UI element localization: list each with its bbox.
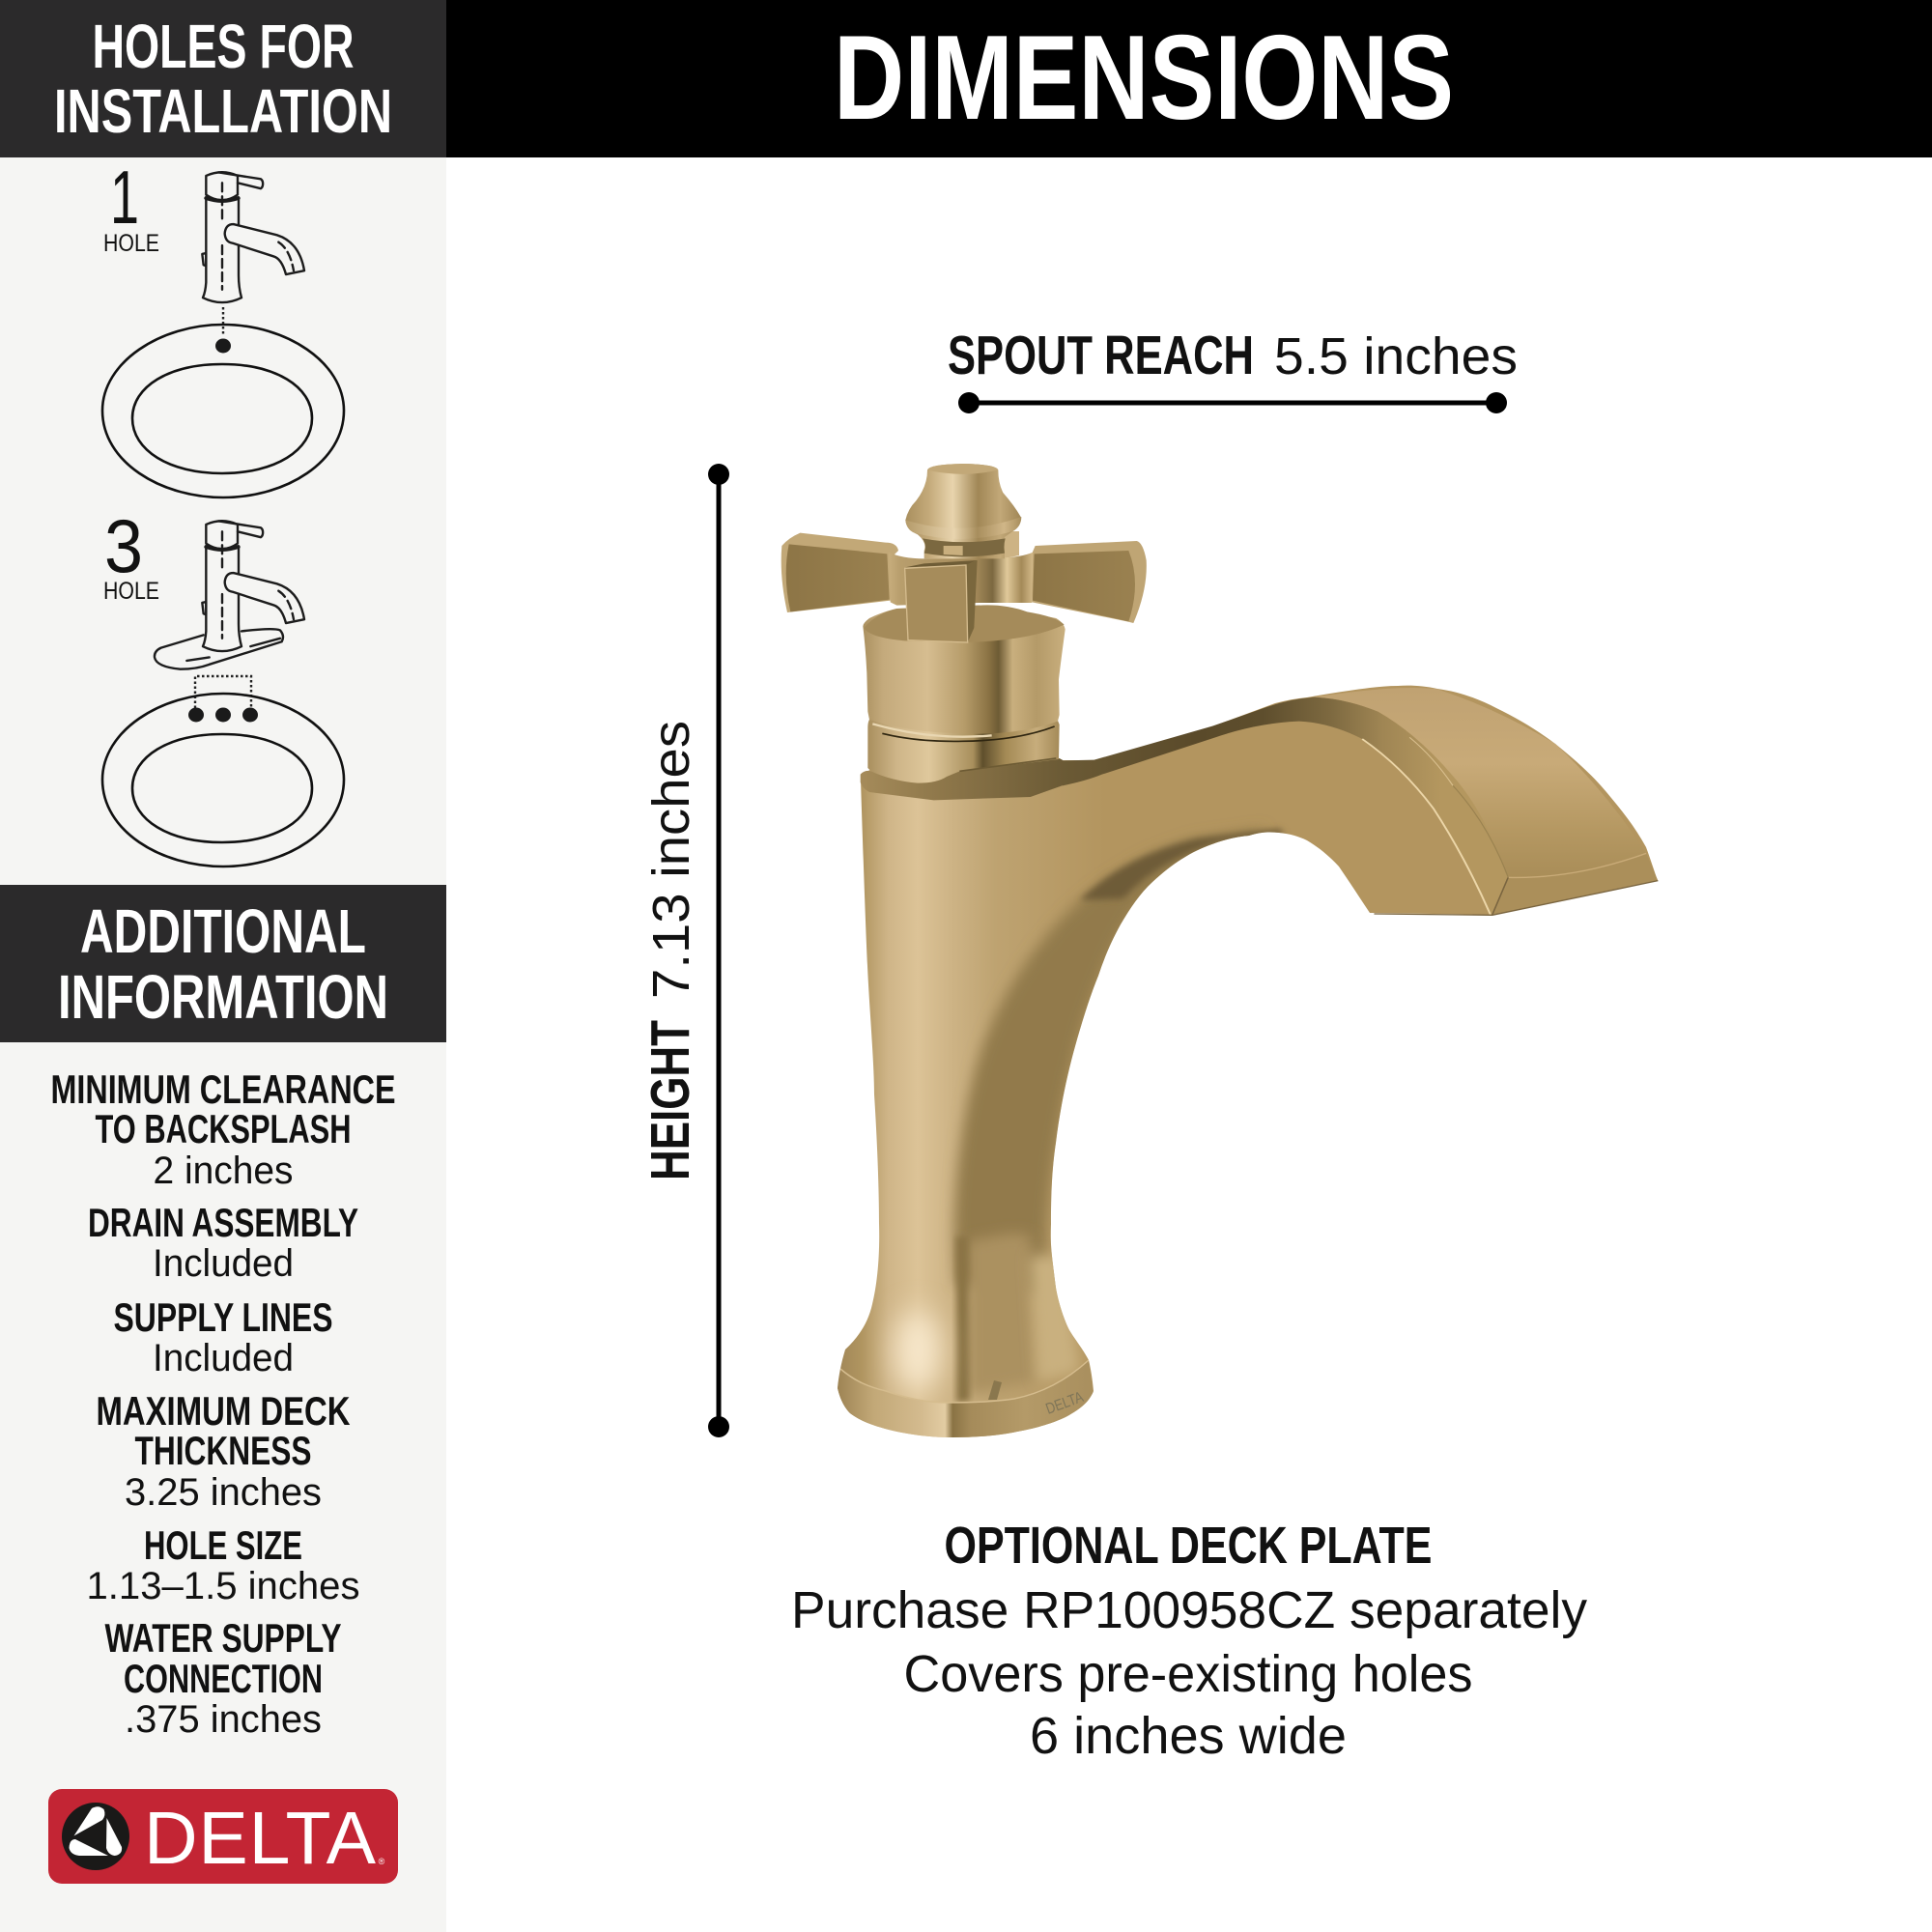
- collar top face: [864, 605, 1065, 642]
- callout: optional deck plate: OPTIONAL DECK PLATE: [945, 1517, 1432, 1575]
- header: additional information: ADDITIONAL: [80, 896, 366, 966]
- header: holes for installation: HOLES FOR: [93, 12, 354, 81]
- spout bevel band: [1063, 697, 1508, 915]
- spec: water supply connection: WATER SUPPLY: [104, 1615, 342, 1661]
- head: collar, neck, handle and knob: [781, 464, 1147, 800]
- callout: optional deck plate: Purchase RP100958CZ separately: [791, 1581, 1587, 1639]
- header: additional information: [0, 885, 446, 1042]
- spec: hole size: [87, 1522, 359, 1607]
- neck: [867, 717, 1060, 783]
- icon: three hole sink: [102, 676, 344, 867]
- spec: minimum clearance: MINIMUM CLEARANCE: [50, 1066, 396, 1112]
- base engraving: DELTA: [1044, 1389, 1086, 1418]
- dimension: height: 7.13 inches: [642, 721, 700, 999]
- icon: single hole sink: [102, 307, 344, 497]
- header: additional information: INFORMATION: [58, 962, 388, 1032]
- label: 3 hole: HOLE: [103, 578, 159, 605]
- spec: drain assembly: Included: [153, 1242, 294, 1285]
- callout: optional deck plate: Covers pre-existing holes: [904, 1645, 1472, 1703]
- header: holes for installation: INSTALLATION: [54, 76, 392, 146]
- spec: maximum deck thickness: [97, 1388, 350, 1514]
- left handle arm: [781, 533, 898, 612]
- spec: water supply connection: CONNECTION: [124, 1656, 323, 1701]
- faucet image: champagne bronze cross-handle faucet: [781, 464, 1658, 1449]
- spec: minimum clearance: TO BACKSPLASH: [95, 1106, 352, 1151]
- base ring: [838, 1361, 1094, 1437]
- collar: [863, 606, 1065, 734]
- spec: supply lines: Included: [153, 1337, 294, 1379]
- logo: delta: [48, 1789, 398, 1884]
- callout: optional deck plate: 6 inches wide: [1030, 1707, 1347, 1765]
- dimension: spout reach: 5.5 inches: [1274, 327, 1518, 385]
- spec: water supply connection: .375 inches: [125, 1698, 322, 1741]
- spec: supply lines: SUPPLY LINES: [114, 1294, 332, 1340]
- spout tip face: [1492, 853, 1658, 915]
- label: 1 hole: [103, 155, 159, 257]
- sidebar background panel: [0, 0, 446, 1932]
- label: 1 hole: 1: [110, 155, 139, 240]
- dimension: spout reach: SPOUT REACH: [948, 325, 1254, 386]
- callout: optional deck plate: [791, 1517, 1587, 1765]
- spec: drain assembly: DRAIN ASSEMBLY: [88, 1200, 358, 1245]
- spec: minimum clearance: 2 inches: [153, 1150, 294, 1192]
- spec: maximum deck thickness: MAXIMUM DECK: [97, 1388, 350, 1434]
- spec: maximum deck thickness: 3.25 inches: [125, 1471, 322, 1514]
- spec: drain assembly: [88, 1200, 358, 1285]
- body shelf below neck: [861, 758, 1063, 800]
- icon: faucet with deck plate line drawing: [155, 521, 304, 669]
- dimension: height: [639, 464, 729, 1437]
- spec: water supply connection: [104, 1615, 342, 1741]
- spout outer face: [1315, 688, 1646, 877]
- icon: single hole faucet line drawing: [202, 172, 304, 302]
- faucet body and spout silhouette: [838, 686, 1658, 1437]
- spec: supply lines: [114, 1294, 332, 1379]
- base notch: [988, 1380, 1002, 1400]
- dimension: height: HEIGHT: [639, 1020, 701, 1180]
- label: 1 hole: HOLE: [103, 230, 159, 257]
- label: 3 hole: 3: [104, 503, 143, 588]
- handle hub: [889, 553, 1033, 606]
- label: 3 hole: [103, 503, 159, 605]
- right handle arm: [1031, 541, 1147, 623]
- spout upper detail: [1063, 688, 1658, 915]
- knob: [905, 464, 1021, 558]
- header: holes for installation: [0, 0, 446, 157]
- spec: maximum deck thickness: THICKNESS: [135, 1428, 311, 1473]
- back stem: [1003, 531, 1019, 558]
- logo: delta: DELTA: [144, 1797, 377, 1880]
- title banner: dimensions: [446, 0, 1932, 157]
- spec: hole size: 1.13–1.5 inches: [87, 1565, 359, 1607]
- title banner: dimensions: DIMENSIONS: [834, 12, 1454, 145]
- shading on arch, lower body and base: [831, 829, 1285, 1449]
- front handle arm: [905, 560, 978, 642]
- dimension: spout reach: [948, 325, 1518, 413]
- spec: minimum clearance: [50, 1066, 396, 1192]
- logo: delta: ®: [379, 1857, 385, 1866]
- spec: hole size: HOLE SIZE: [144, 1522, 302, 1568]
